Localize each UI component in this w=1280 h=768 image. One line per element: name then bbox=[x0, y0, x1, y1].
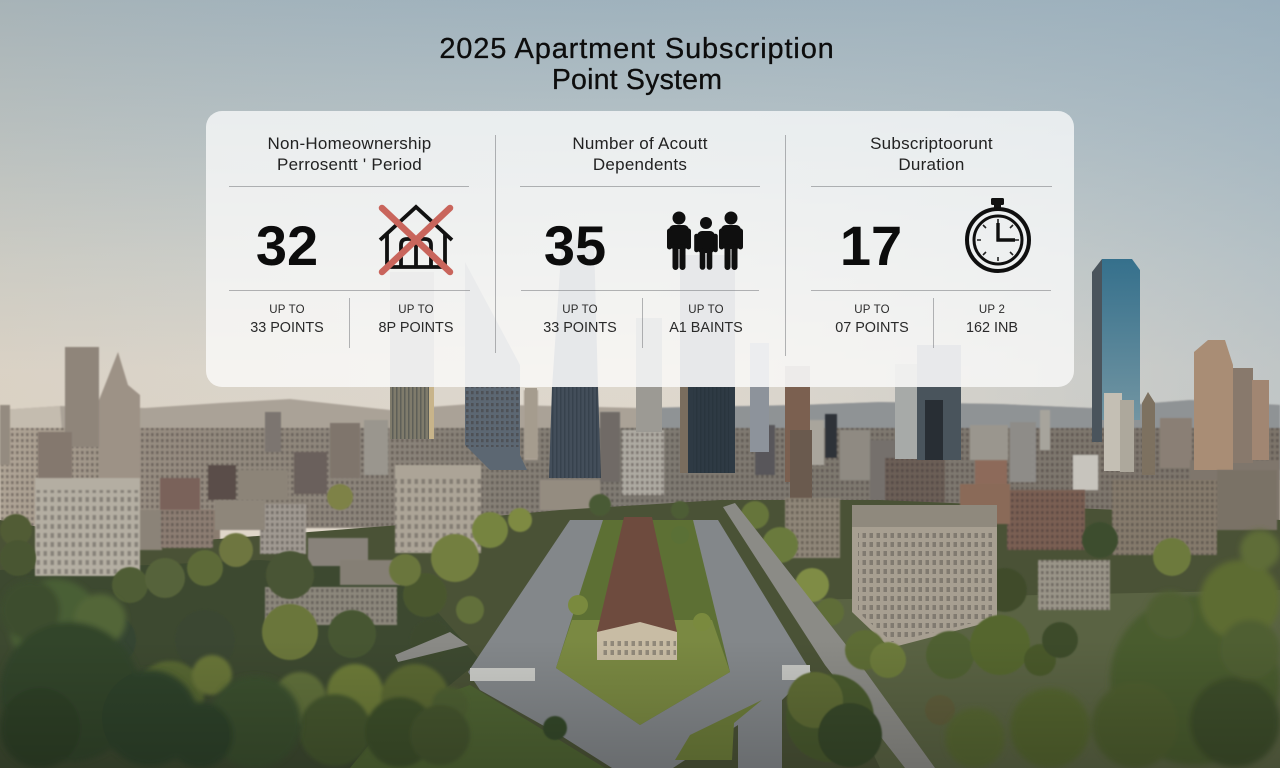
column: subscription duration bbox=[811, 134, 1052, 348]
foreground trees bbox=[84, 610, 1078, 767]
heading: non-homeownership: Non-Homeownership bbox=[268, 134, 431, 153]
stat: up to 33 points bbox=[250, 304, 324, 336]
stat: 07 points: 07 POINTS bbox=[835, 320, 909, 336]
stat: 07 points: UP TO bbox=[854, 304, 890, 316]
foreground building right bbox=[852, 505, 997, 648]
stat: A1 points bbox=[669, 304, 743, 336]
hills bbox=[0, 399, 1280, 470]
heading: duration: Subscriptoorunt bbox=[870, 134, 993, 153]
heading: dependents: Number of Acoutt bbox=[572, 134, 708, 153]
stat: up to 8P points: 8P POINTS bbox=[379, 320, 453, 336]
stat: up to 33 points: UP TO bbox=[269, 304, 305, 316]
number: 17: 17 bbox=[840, 214, 902, 277]
stat: up to 33 points: 33 POINTS bbox=[543, 320, 617, 336]
stat: 07 points bbox=[835, 304, 909, 336]
heading: non-homeownership: Perrosentt ' Period bbox=[277, 155, 422, 174]
heading: non-homeownership bbox=[268, 134, 431, 174]
title bbox=[439, 33, 835, 96]
column: non-homeownership period bbox=[229, 134, 470, 348]
icon: crossed-out house bbox=[378, 204, 454, 276]
stat: 162 INB bbox=[966, 304, 1018, 336]
stat: up to 33 points: 33 POINTS bbox=[250, 320, 324, 336]
icon: three people bbox=[667, 212, 743, 270]
stat: up to 8P points bbox=[379, 304, 453, 336]
tall towers bbox=[38, 240, 1269, 500]
heading: duration: Duration bbox=[898, 155, 965, 174]
stat: up to 8P points: UP TO bbox=[398, 304, 434, 316]
stat: up to 33 points: UP TO bbox=[562, 304, 598, 316]
stat: up to 33 points bbox=[543, 304, 617, 336]
trees behind roads bbox=[0, 484, 1191, 660]
distant city band bbox=[0, 390, 1280, 548]
heading: duration bbox=[870, 134, 993, 174]
stat: A1 points: UP TO bbox=[688, 304, 724, 316]
number: 32: 32 bbox=[256, 214, 318, 277]
icon: stopwatch bbox=[965, 198, 1031, 273]
column: adult dependents bbox=[520, 134, 760, 348]
panel: scoring card bbox=[206, 111, 1074, 387]
heading: dependents bbox=[572, 134, 708, 174]
title: Point System bbox=[552, 64, 722, 96]
stat: A1 points: A1 BAINTS bbox=[669, 320, 743, 336]
mid buildings bbox=[35, 465, 1277, 625]
stat: 162 INB: 162 INB bbox=[966, 320, 1018, 336]
number: 35: 35 bbox=[544, 214, 606, 277]
ground bbox=[0, 500, 1280, 768]
title: 2025 Apartment Subscription bbox=[439, 33, 835, 65]
stat: 162 INB: UP 2 bbox=[979, 304, 1005, 316]
roads and grass bbox=[350, 503, 935, 768]
heading: dependents: Dependents bbox=[593, 155, 687, 174]
